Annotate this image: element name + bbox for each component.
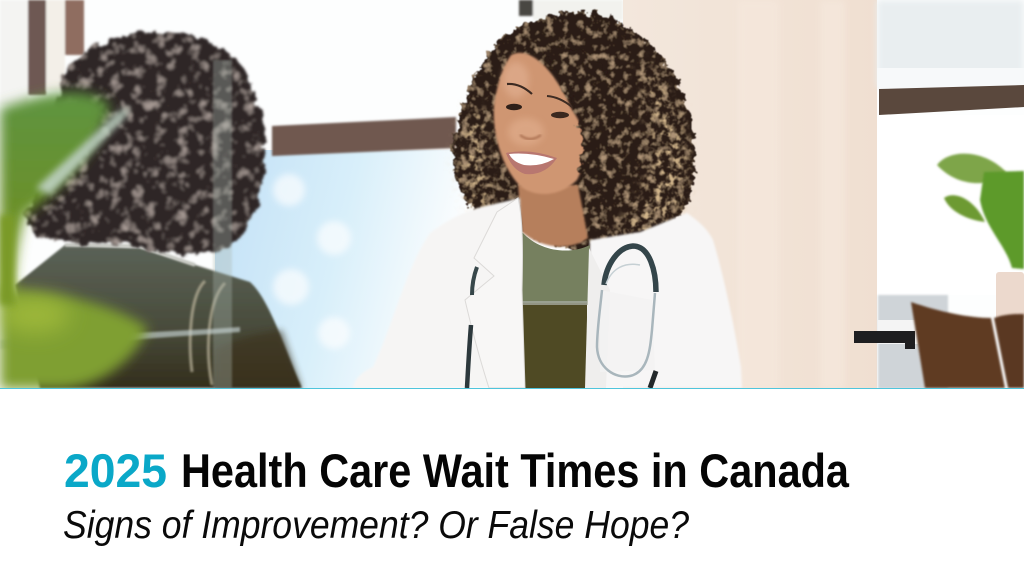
stethoscope xyxy=(467,246,656,388)
window background xyxy=(0,0,1024,389)
chairs xyxy=(911,302,1024,388)
nose xyxy=(520,135,541,139)
coat lapels xyxy=(465,198,655,388)
hair front over forehead xyxy=(545,46,610,200)
window reflection on glass xyxy=(213,60,232,388)
title: Health Care Wait Times in Canada xyxy=(181,444,850,497)
back-facing patient xyxy=(0,32,302,388)
lab coat xyxy=(353,198,525,388)
title: 2025 xyxy=(64,444,167,497)
photo: doctor talking with a patient xyxy=(0,0,1024,388)
patient jacket xyxy=(15,245,302,388)
right window with plant and chair xyxy=(854,0,1024,389)
eyes and brows xyxy=(506,84,572,118)
wall and curtain xyxy=(623,0,877,389)
patient hair xyxy=(25,32,265,254)
icon: potted plant xyxy=(937,154,1024,320)
doctor xyxy=(353,12,742,388)
blurred foreground leaves xyxy=(0,92,148,389)
face xyxy=(494,53,585,194)
table edge xyxy=(854,331,915,349)
golden curls xyxy=(458,60,688,250)
neck xyxy=(518,185,588,247)
doctor hair back xyxy=(452,12,695,258)
smile xyxy=(506,151,557,174)
sweater xyxy=(522,232,590,388)
accent line under photo xyxy=(0,388,1024,389)
